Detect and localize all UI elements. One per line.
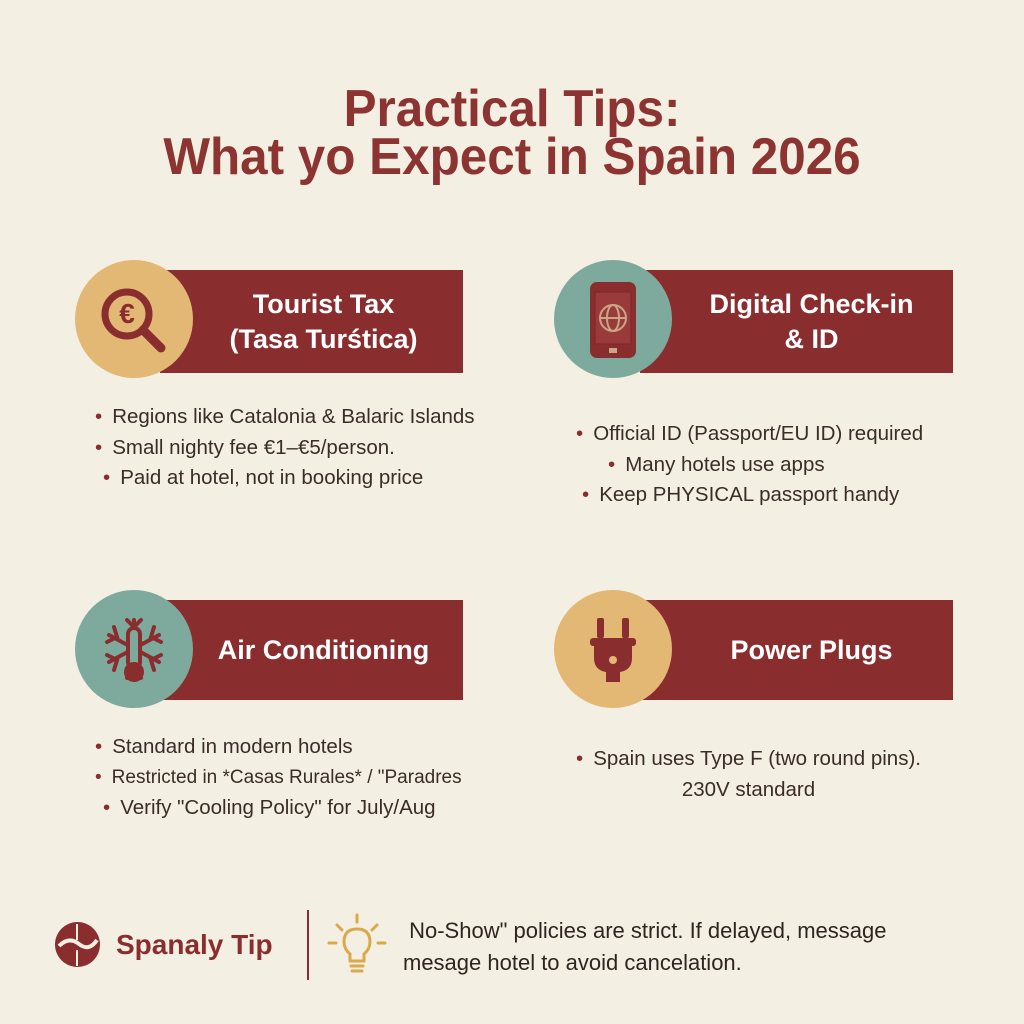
banner: tourist tax: Tourist Tax	[253, 288, 394, 318]
icon: euro magnifier: €	[119, 298, 135, 329]
tip text: No-Show" policies are strict. If delayed, message	[409, 918, 886, 943]
bullets: tourist tax: Regions like Catalonia & Balaric Islands	[112, 405, 475, 428]
banner: tourist tax: (Tasa Turśtica)	[229, 324, 418, 354]
bullets: air conditioning: Verify "Cooling Policy" for July/Aug	[120, 796, 436, 819]
banner: air conditioning	[160, 600, 463, 700]
bullets: tourist tax: Small nighty fee €1–€5/person.	[112, 436, 395, 458]
bullets: air conditioning: Restricted in *Casas Rurales* / "Paradres	[112, 766, 462, 788]
banner: digital check-in	[640, 270, 953, 373]
logo	[55, 922, 100, 967]
banner: digital check-in: & ID	[784, 324, 838, 354]
bullets: tourist tax	[96, 405, 475, 489]
bullets: power plugs: 230V standard	[682, 778, 815, 800]
banner: power plugs: Power Plugs	[730, 634, 893, 664]
divider	[307, 910, 309, 980]
banner: digital check-in: Digital Check-in	[709, 288, 914, 318]
bullets: digital check-in: Official ID (Passport/EU ID) required	[593, 422, 923, 445]
icon: euro magnifier	[75, 260, 193, 378]
banner: power plugs	[640, 600, 953, 700]
title: Practical Tips:	[344, 80, 680, 138]
bullets: air conditioning	[96, 735, 462, 819]
icon: lightbulb	[328, 914, 386, 972]
title	[163, 80, 861, 186]
banner: tourist tax	[160, 270, 463, 373]
icon: plug	[554, 590, 672, 708]
panel: power plugs	[554, 590, 953, 800]
bullets: air conditioning: Standard in modern hotels	[112, 735, 353, 758]
bullets: digital check-in: Keep PHYSICAL passport handy	[599, 483, 899, 506]
panel: air conditioning	[75, 590, 463, 819]
title: What yo Expect in Spain 2026	[163, 128, 861, 186]
bullets: digital check-in	[576, 422, 923, 506]
tip text	[403, 918, 886, 975]
icon: thermometer snowflake	[75, 590, 193, 708]
bullets: power plugs	[576, 747, 921, 800]
footer: spanaly tip	[55, 910, 886, 980]
panel: digital check-in	[554, 260, 953, 506]
bullets: digital check-in: Many hotels use apps	[625, 452, 825, 476]
brand name: Spanaly Tip	[116, 929, 273, 960]
banner: air conditioning: Air Conditioning	[218, 634, 429, 664]
icon: phone globe	[554, 260, 672, 378]
tip text: mesage hotel to avoid cancelation.	[403, 950, 742, 975]
panel: tourist tax	[75, 260, 475, 489]
bullets: power plugs: Spain uses Type F (two round pins).	[593, 747, 921, 770]
bullets: tourist tax: Paid at hotel, not in booking price	[120, 466, 423, 489]
